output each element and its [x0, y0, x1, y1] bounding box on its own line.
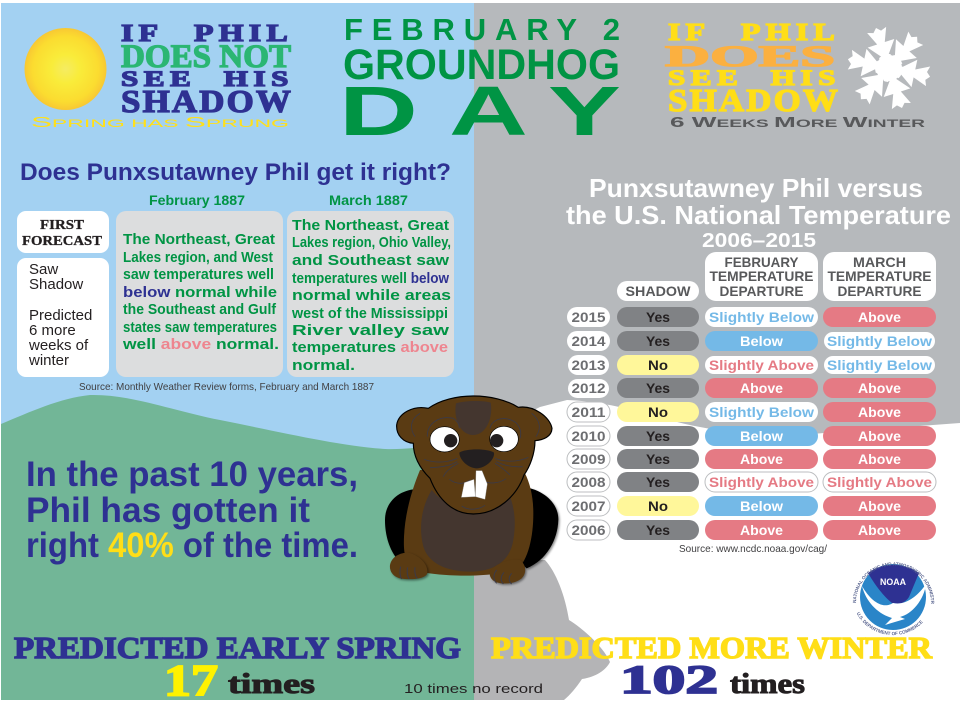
row: 2014: Below: [740, 333, 783, 349]
row: 2013: 2013: [572, 357, 606, 373]
panel: february 1887 text: well above normal.: [122, 336, 279, 353]
panel: march 1887 text: temperatures well below: [292, 270, 449, 287]
row: 2008: Yes: [646, 474, 670, 490]
row: 2006: Above: [740, 522, 783, 538]
text: phil right 40 percent: In the past 10 years,: [26, 455, 358, 494]
heading: does punxsutawney phil get it right: Does Punxsutawney Phil get it right?: [20, 159, 451, 186]
illustration: groundhog: [385, 396, 558, 584]
title: february 2 groundhog day: [339, 12, 621, 150]
icon: noaa logo: NATIONAL OCEANIC AND ATMOSPHERIC ADMINISTRATION: [852, 562, 934, 604]
stat: predicted early spring: [14, 630, 461, 705]
row: 2007: [567, 496, 936, 516]
stat: predicted more winter: [491, 630, 933, 702]
row: 2008: [567, 472, 936, 492]
column header: march temperature departure: DEPARTURE: [838, 283, 922, 299]
column header: february temperature departure: TEMPERATURE: [710, 268, 814, 284]
row: 2007: 2007: [572, 498, 606, 514]
row: 2011: No: [648, 404, 668, 420]
note: 10 times no record: 10 times no record: [404, 681, 543, 696]
source: monthly weather review: Source: Monthly Weather Review forms, February and March 1887: [79, 381, 374, 393]
text: phil right 40 percent: [26, 455, 358, 565]
table: shadow and temperature departures: [567, 252, 936, 540]
background: white snow hill: [474, 400, 960, 700]
column header: february temperature departure: [705, 252, 818, 301]
forehead patch: [455, 401, 491, 435]
panel: no shadow prediction: [24, 21, 294, 131]
row: 2015: Slightly Below: [709, 309, 814, 325]
panel: saw shadow forecast: Shadow: [29, 276, 83, 293]
row: 2007: Above: [858, 498, 901, 514]
haunches: [385, 487, 558, 568]
row: 2015: Yes: [646, 309, 670, 325]
row: 2015: [567, 307, 936, 327]
panel: saw shadow forecast: [17, 258, 109, 377]
panel: march 1887 text: normal.: [292, 357, 355, 374]
heading: if phil does not see his shadow: SHADOW: [121, 83, 293, 119]
background: grey sky: [474, 3, 960, 700]
panel: february 1887 text: below normal while: [123, 284, 277, 301]
icon: noaa logo: NOAA: [880, 577, 906, 587]
body: [404, 470, 533, 576]
row: 2013: No: [648, 357, 668, 373]
column header: february temperature departure: DEPARTURE: [720, 283, 804, 299]
panel: saw shadow forecast: 6 more: [29, 322, 76, 339]
panel: first forecast label: FIRST: [40, 217, 84, 232]
row: 2008: Slightly Above: [827, 474, 932, 490]
heading: phil versus national temperature: Punxsutawney Phil versus: [589, 173, 923, 203]
head: [397, 396, 552, 514]
row: 2012: Above: [858, 380, 901, 396]
panel: february 1887 text: The Northeast, Great: [123, 231, 275, 248]
panel: march 1887 text: west of the Mississippi: [291, 305, 448, 322]
heading: if phil does see his shadow: IF PHIL: [668, 20, 840, 46]
heading: if phil does see his shadow: SEE HIS: [668, 65, 841, 90]
row: 2009: Above: [740, 451, 783, 467]
whiskers and mouth: [424, 457, 528, 509]
row: 2010: 2010: [572, 428, 606, 444]
heading: phil versus national temperature: 2006–2015: [702, 230, 816, 252]
column header: february temperature departure: FEBRUARY: [724, 254, 799, 270]
source: ncdc: Source: www.ncdc.noaa.gov/cag/: [679, 543, 827, 555]
row: 2010: Below: [740, 428, 783, 444]
column header: march temperature departure: MARCH: [853, 254, 906, 270]
row: 2009: Above: [858, 451, 901, 467]
panel: shadow prediction: [665, 15, 943, 131]
ear and brow lines: [411, 413, 539, 438]
nose: [459, 449, 494, 468]
column heading: march 1887: March 1887: [329, 192, 408, 208]
row: 2013: Slightly Above: [709, 357, 814, 373]
row: 2006: Yes: [646, 522, 670, 538]
background: grey rock: [474, 560, 610, 700]
row: 2007: No: [648, 498, 668, 514]
column header: shadow: SHADOW: [626, 283, 691, 299]
panel: saw shadow forecast: winter: [28, 352, 69, 369]
heading: if phil does not see his shadow: SEE HIS: [121, 66, 294, 91]
row: 2006: 2006: [572, 522, 606, 538]
panel: february 1887 text: states saw temperatures: [123, 319, 277, 336]
panel: february 1887 text: the Southeast and Gulf: [123, 301, 277, 318]
heading: if phil does not see his shadow: IF PHIL: [121, 21, 293, 47]
teeth: [461, 471, 487, 499]
column heading: february 1887: February 1887: [149, 192, 245, 208]
title: february 2 groundhog day: DAY: [339, 72, 621, 150]
icon: noaa logo: U.S. DEPARTMENT OF COMMERCE: [857, 612, 923, 636]
row: 2011: Slightly Below: [709, 404, 814, 420]
row: 2013: Slightly Below: [827, 357, 932, 373]
heading: if phil does see his shadow: SHADOW: [668, 82, 840, 118]
background: blue sky: [1, 3, 474, 700]
row: 2011: [567, 402, 936, 422]
row: 2014: 2014: [572, 333, 606, 349]
column header: march temperature departure: [823, 252, 936, 301]
panel: february 1887 text: saw temperatures well: [123, 266, 274, 283]
row: 2008: 2008: [572, 474, 606, 490]
stat: predicted early spring: PREDICTED EARLY SPRING: [14, 630, 461, 665]
column header: shadow: [617, 281, 699, 301]
icon: sun: [24, 28, 106, 110]
stat: predicted more winter: 102: [620, 657, 718, 702]
eyes: [430, 426, 518, 452]
panel: march 1887 text: The Northeast, Great: [292, 217, 449, 234]
row: 2009: Yes: [646, 451, 670, 467]
row: 2015: Above: [858, 309, 901, 325]
column header: march temperature departure: TEMPERATURE: [828, 268, 932, 284]
panel: saw shadow forecast: Predicted: [29, 307, 92, 324]
row: 2011: Above: [858, 404, 901, 420]
panel: march 1887 text: River valley saw: [292, 322, 449, 339]
row: 2012: Above: [740, 380, 783, 396]
row: 2006: [567, 520, 936, 540]
claws: [400, 567, 512, 584]
row: 2006: Above: [858, 522, 901, 538]
heading: if phil does not see his shadow: [121, 21, 294, 119]
belly: [421, 490, 515, 572]
panel: march 1887 text: normal while areas: [292, 287, 451, 304]
stat: predicted early spring: times: [228, 668, 315, 700]
panel: saw shadow forecast: weeks of: [28, 337, 89, 354]
panel: first forecast label: [17, 211, 109, 253]
text: phil right 40 percent: Phil has gotten it: [26, 491, 310, 530]
panel: first forecast label: FORECAST: [22, 233, 102, 248]
title: february 2 groundhog day: GROUNDHOG: [343, 41, 620, 89]
stat: predicted more winter: times: [730, 668, 805, 700]
row: 2014: [567, 331, 935, 351]
row: 2007: Below: [740, 498, 783, 514]
panel: march 1887 text: Lakes region, Ohio Valley,: [292, 234, 451, 251]
row: 2008: Slightly Above: [709, 474, 814, 490]
panel: march 1887 text: [287, 211, 454, 377]
row: 2014: Yes: [646, 333, 670, 349]
heading: phil versus national temperature: the U.S. National Temperature: [566, 200, 951, 230]
row: 2010: [567, 426, 936, 446]
stat: predicted more winter: PREDICTED MORE WINTER: [491, 630, 933, 665]
panel: saw shadow forecast: Saw: [29, 261, 58, 278]
row: 2012: [568, 378, 936, 398]
row: 2014: Slightly Below: [827, 333, 932, 349]
text: phil right 40 percent: right 40% of the time.: [26, 526, 358, 565]
caption: spring has sprung: S PRING HAS S PRUNG: [31, 114, 289, 131]
heading: phil versus national temperature: [566, 173, 951, 252]
panel: february 1887 text: [116, 211, 283, 377]
caption: 6 weeks more winter: 6 W EEKS M ORE W INTER: [670, 114, 925, 131]
heading: if phil does not see his shadow: DOES NOT: [121, 39, 291, 75]
heading: if phil does see his shadow: DOES: [665, 40, 835, 73]
background: green hill: [1, 395, 474, 700]
row: 2015: 2015: [572, 309, 606, 325]
paws: [390, 553, 525, 584]
row: 2011: 2011: [572, 404, 606, 420]
icon: snowflake: [835, 15, 943, 121]
title: february 2 groundhog day: FEBRUARY 2: [344, 12, 620, 47]
row: 2009: 2009: [572, 451, 606, 467]
row: 2012: 2012: [572, 380, 606, 396]
panel: march 1887 text: and Southeast saw: [292, 252, 449, 269]
heading: if phil does see his shadow: [665, 20, 841, 118]
panel: march 1887 text: temperatures above: [292, 339, 448, 356]
row: 2010: Above: [858, 428, 901, 444]
panel: february 1887 text: Lakes region, and West: [123, 249, 273, 266]
row: 2013: [568, 355, 935, 375]
row: 2012: Yes: [646, 380, 670, 396]
row: 2010: Yes: [646, 428, 670, 444]
row: 2009: [567, 449, 936, 469]
stat: predicted early spring: 17: [164, 656, 218, 705]
